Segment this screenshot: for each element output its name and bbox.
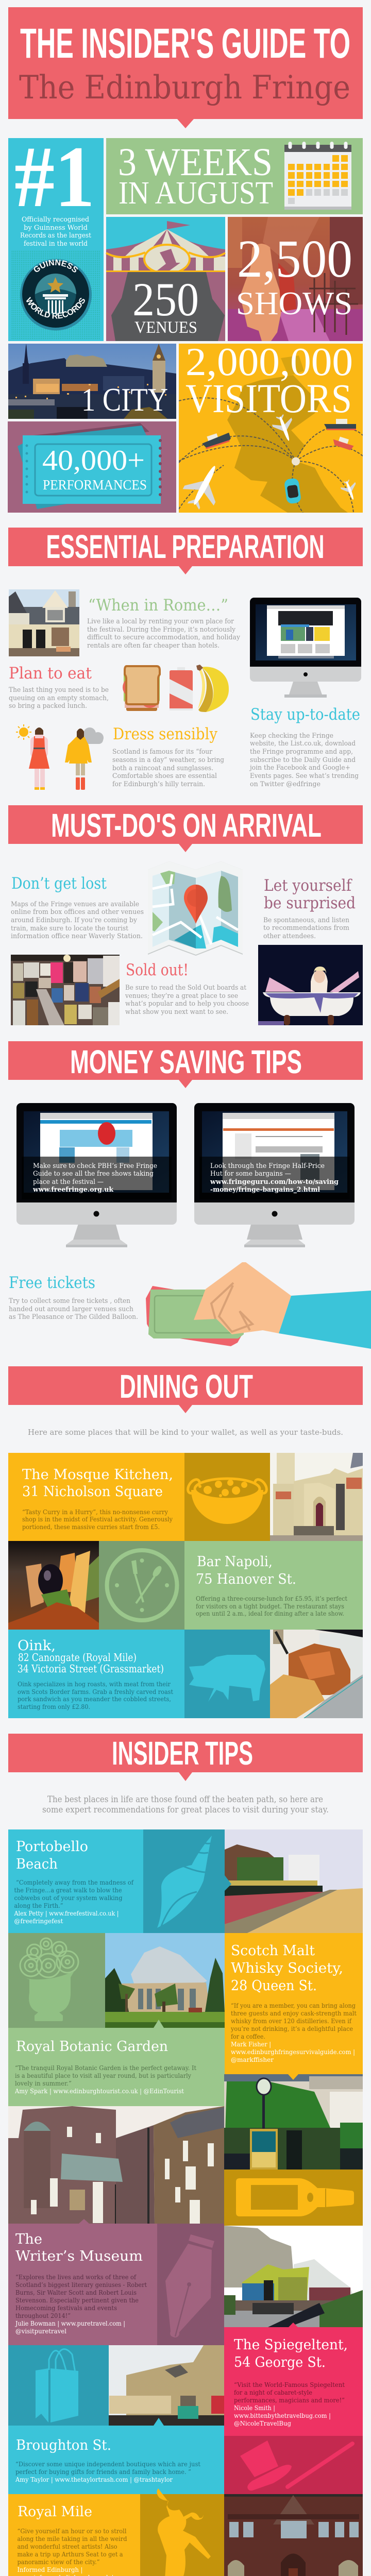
quote: Scotland’s biggest literary geniuses - Robert xyxy=(15,2281,147,2289)
panel: 2,000,000 visitors xyxy=(178,340,363,515)
panel: 250 venues xyxy=(106,217,225,341)
illustration: hand holding tickets xyxy=(146,1262,371,1349)
heading banner: essential preparation xyxy=(8,528,363,574)
photo: rigatoni pasta with olive xyxy=(8,1541,99,1630)
attribution: www.bittenbythetravelbug.com | xyxy=(234,2412,331,2419)
caption text: Look through the Fringe Half-Price xyxy=(210,1162,325,1170)
body text: Be spontaneous, and listen xyxy=(263,917,350,924)
icon: Guinness World Records badge xyxy=(20,259,92,331)
heading xyxy=(18,1638,164,1675)
stat: visitors: VISITORS xyxy=(185,377,352,421)
quote: for a coffee. xyxy=(231,2032,265,2040)
stat: 2,500: 2,500 xyxy=(237,229,352,289)
panel: Portobello Beach xyxy=(8,1829,225,1933)
heading banner: money saving tips xyxy=(8,1041,363,1088)
body text: website, the List.co.uk, download xyxy=(250,740,356,748)
quote: “Explores the lives and works of three of xyxy=(15,2273,137,2281)
panel: The Mosque Kitchen xyxy=(8,1453,270,1541)
body text: rentals are often far cheaper than hotels. xyxy=(87,642,220,650)
photo: Edinburgh at dusk xyxy=(8,344,176,419)
stat: 250: 250 xyxy=(132,273,199,326)
attribution: @visitpuretravel xyxy=(15,2327,66,2335)
photo: Broughton Street xyxy=(109,2345,224,2426)
icon: small plane xyxy=(340,479,356,500)
heading banner: insider tips: INSIDER TIPS xyxy=(112,1735,253,1772)
panel: Bar Napoli xyxy=(99,1541,363,1630)
quote: along the Firth.” xyxy=(14,1902,63,1909)
icon: bananas xyxy=(196,665,229,712)
panel: number one festival xyxy=(8,128,104,341)
photo: Scottish National Portrait Gallery xyxy=(224,2494,363,2576)
heading: Stay up-to-date xyxy=(250,705,360,724)
quote: make a trip up Arthurs Seat to get a xyxy=(18,2550,123,2558)
attribution xyxy=(231,2040,355,2063)
text: Guinness record: Records as the largest xyxy=(20,232,92,240)
heading: Portobello xyxy=(16,1839,88,1855)
heading: Writer’s Museum xyxy=(15,2248,143,2264)
panel: three weeks in August xyxy=(106,138,363,214)
description: Offering a three-course-lunch for £5.95, it’s perfect xyxy=(196,1595,347,1602)
description: open until 2 a.m., ideal for dining after a late show. xyxy=(196,1609,344,1617)
quote: and wonderful street artists! Also xyxy=(18,2543,117,2550)
quote xyxy=(15,2273,147,2319)
heading: 31 Nicholson Square xyxy=(22,1484,163,1500)
stat: venues: VENUES xyxy=(134,318,197,337)
photo: performer on stage xyxy=(228,217,363,341)
body text: around Edinburgh. If you’re coming by xyxy=(11,917,138,924)
attribution: www.edinburghfringesurvivalguide.com | xyxy=(231,2048,355,2056)
panel: bottle icon xyxy=(224,2170,363,2226)
quote: panoramic view of the city.” xyxy=(18,2558,100,2566)
photo: Edinburgh Central Mosque xyxy=(270,1453,363,1541)
quote: “Give yourself an hour or so to stroll xyxy=(18,2527,127,2535)
attribution xyxy=(234,2404,331,2427)
quote: “Completely away from the madness of xyxy=(16,1878,134,1886)
attribution: Nicole Smith | xyxy=(234,2404,275,2412)
attribution: Informed Edinburgh | xyxy=(18,2566,82,2573)
caption text: www.fringeguru.com/how-to/saving xyxy=(210,1178,339,1186)
attribution: Alex Petty | www.freefestival.co.uk | xyxy=(14,1909,119,1917)
attribution: Amy Spark | www.edinburghtourist.co.uk | @EdinTourist xyxy=(14,2087,184,2095)
attribution xyxy=(14,1909,119,1925)
body text: Maps of the Fringe venues are available xyxy=(11,901,139,908)
quote: three guests and enjoy cask-strength malt xyxy=(231,2009,357,2017)
icon: seashell xyxy=(157,1836,212,1928)
body text: information office near Waverly Station. xyxy=(11,933,143,940)
body text xyxy=(263,917,350,940)
quote: along the mile taking in all the weird xyxy=(18,2535,127,2543)
text: Guinness record: Officially recognised xyxy=(22,216,89,224)
heading banner: dining out xyxy=(8,1366,363,1413)
description: own Scots Border farms. Grab a freshly carved roast xyxy=(18,1688,173,1696)
text: Guinness record: festival in the world xyxy=(24,240,88,248)
quote: whisky from over 120 distilleries. Even if xyxy=(231,2017,352,2025)
heading: 54 George St. xyxy=(234,2354,326,2370)
body text: to recommendations from xyxy=(263,924,349,932)
photo: Palm House xyxy=(105,1933,225,2028)
icon: sandwich xyxy=(123,666,160,711)
description: for visitors on a tight budget. The restaurant stays xyxy=(196,1602,344,1610)
quote: performances, magicians and more!” xyxy=(234,2396,345,2404)
quote: lovely in summer.” xyxy=(15,2079,72,2087)
heading: 34 Victoria Street (Grassmarket) xyxy=(18,1663,164,1675)
body text: the festival. During the Fringe, it’s notoriously xyxy=(87,626,236,634)
icon: ticket xyxy=(18,423,162,509)
body text: subscribe to the Daily Guide and xyxy=(250,756,356,764)
caption text xyxy=(32,1162,157,1194)
intro text: insider tips: some expert recommendations for great places to visit during your stay. xyxy=(42,1805,329,1815)
heading: The Mosque Kitchen, xyxy=(22,1467,173,1483)
quote: the Fringe…a great walk to blow the xyxy=(14,1886,122,1894)
quote: Stevenson. Especially pertinent given the xyxy=(15,2296,139,2304)
quote xyxy=(234,2381,345,2404)
attribution xyxy=(18,2566,113,2576)
body text: train, make sure to locate the tourist xyxy=(11,925,129,933)
heading xyxy=(234,2337,348,2370)
heading: 82 Canongate (Royal Mile) xyxy=(18,1651,137,1664)
icon: woman in raincoat with cloud xyxy=(65,727,104,790)
tip: free tickets xyxy=(9,1274,138,1321)
heading: Broughton St. xyxy=(16,2437,111,2453)
description xyxy=(18,1680,173,1710)
panel: Oink xyxy=(8,1630,270,1718)
stat: 3 weeks: 3 WEEKS xyxy=(118,141,273,184)
attribution: Julie Bowman | www.puretravel.com | xyxy=(14,2319,125,2327)
description xyxy=(22,1508,173,1531)
stat: #1: #1 xyxy=(14,128,95,225)
photo: performer in a bathtub xyxy=(258,945,363,1025)
text: Guinness record: by Guinness World xyxy=(24,224,88,232)
tip: stay up-to-date xyxy=(249,705,360,788)
body text: join the Facebook and Google+ xyxy=(249,764,350,772)
body text: other attendees. xyxy=(263,933,316,940)
panel: Royal Mile xyxy=(8,2488,224,2576)
icon: Guinness World Records badge: GUINNESS xyxy=(34,260,78,273)
heading: “When in Rome…” xyxy=(88,596,228,615)
panel: Scotch Malt Whisky Society xyxy=(225,1933,363,2074)
caption overlay xyxy=(199,1157,350,1199)
heading: Royal Mile xyxy=(18,2504,92,2520)
body text xyxy=(9,1297,138,1321)
icon: woman in summer dress with sun xyxy=(16,724,49,790)
quote: “If you are a member, you can bring along xyxy=(231,2002,356,2009)
body text: on Twitter @edfringe xyxy=(250,781,321,788)
heading banner: insider tips xyxy=(8,1734,363,1781)
quote: “Visit the World-Famous Spiegeltent xyxy=(234,2381,345,2388)
stat: 40,000+: 40,000+ xyxy=(42,445,145,477)
caption text: -money/fringe-bargains_2.html xyxy=(210,1186,320,1194)
body text: difficult to secure accommodation, and holiday xyxy=(87,634,241,641)
icon: desktop monitor showing The List xyxy=(250,598,361,698)
photo: The Writer's Museum xyxy=(8,2106,224,2224)
tip: let yourself be surprised: be surprised xyxy=(264,894,356,912)
body text: Keep checking the Fringe xyxy=(250,732,333,740)
heading: The xyxy=(15,2231,42,2247)
body text: so bring a packed lunch. xyxy=(9,702,87,710)
body text: for Edinburgh’s hilly terrain. xyxy=(112,781,205,788)
quote: Burns, Sir Walter Scott and Robert Louis xyxy=(15,2289,137,2296)
caption text: place at the festival — xyxy=(33,1178,104,1186)
body text: both a raincoat and sunglasses. xyxy=(112,765,213,772)
panel: monitor with Free Fringe guide xyxy=(16,1103,177,1247)
attribution: @NicoleTravelBug xyxy=(234,2419,291,2427)
icon: ferry two xyxy=(324,419,356,430)
heading xyxy=(231,1943,343,1994)
body text: seasons in a day” weather, so bring xyxy=(112,756,224,764)
description: Oink specializes in hog roasts, with meat from their xyxy=(18,1680,171,1688)
body text: Events pages. See what’s trending xyxy=(250,772,359,780)
tip: plan to eat xyxy=(9,664,109,710)
body text: venues; they’re a great place to see xyxy=(125,992,238,1000)
description: “Tasty Curry in a Hurry”, this no-nonsense curry xyxy=(22,1508,168,1516)
icon: jester xyxy=(157,2488,211,2576)
quote: for a night of cabaret-style xyxy=(234,2388,312,2396)
intro text: dining out: Here are some places that will be kind to your wallet, as well as your taste-buds. xyxy=(28,1428,343,1437)
tip: when in Rome xyxy=(87,596,241,650)
body text: the Fringe programme and app, xyxy=(250,748,353,756)
quote xyxy=(230,2002,357,2040)
heading: 75 Hanover St. xyxy=(196,1571,296,1587)
icon: flower urn xyxy=(20,1938,78,2021)
stat: shows: SHOWS xyxy=(236,285,352,321)
icon: pig xyxy=(189,1655,265,1702)
heading banner: dining out: DINING OUT xyxy=(120,1368,253,1405)
attribution xyxy=(14,2319,125,2335)
quote xyxy=(15,2064,196,2087)
panel: monitor with Fringe Half-Price Hut xyxy=(194,1103,355,1247)
caption text: Guide to see all the free shows taking xyxy=(33,1170,154,1178)
icon: fountain pen nib xyxy=(165,2234,214,2337)
intro text: insider tips xyxy=(42,1794,329,1815)
description: shop is in the midst of Festival activity. Generously xyxy=(22,1515,173,1523)
body text: what show you next want to see. xyxy=(125,1008,228,1016)
tip: don't get lost xyxy=(11,874,144,940)
body text xyxy=(249,732,359,788)
icon: clock with cutlery xyxy=(107,1550,177,1620)
tip: sold out xyxy=(125,961,249,1016)
body text xyxy=(87,618,241,650)
quote: Homecoming festivals and events xyxy=(15,2304,117,2312)
heading xyxy=(16,1839,88,1872)
description: portioned, these massive curries start from £5. xyxy=(22,1523,160,1531)
heading banner: must-do's on arrival xyxy=(8,805,363,852)
quote: cobwebs out of your system walking xyxy=(14,1894,123,1902)
heading: Oink, xyxy=(18,1638,56,1654)
icon: Guinness World Records badge: WORLD RECORDS xyxy=(26,297,85,318)
icon: car xyxy=(284,478,301,504)
description: pork sandwich as you meander the cobbled streets, xyxy=(18,1695,171,1703)
body text: Comfortable shoes are essential xyxy=(112,772,217,780)
body text: Be sure to read the Sold Out boards at xyxy=(125,984,247,992)
body text: queuing on an empty stomach, xyxy=(9,694,109,702)
icon: folded map with pin xyxy=(148,861,243,956)
caption text: Make sure to check PBH’s Free Fringe xyxy=(33,1162,157,1170)
photo: whisky society entrance xyxy=(224,2074,363,2170)
heading xyxy=(196,1554,296,1587)
icon: curry pot xyxy=(185,1478,269,1524)
attribution: Mark Fisher | xyxy=(231,2040,271,2048)
quote xyxy=(18,2527,127,2566)
body text: as The Pleasance or The Gilded Balloon. xyxy=(9,1313,138,1321)
tip: let yourself be surprised xyxy=(263,876,356,940)
body text: Live like a local by renting your own place for xyxy=(87,618,234,625)
quote: you’re not drinking, it’s a delightful place xyxy=(230,2025,353,2032)
heading xyxy=(15,2231,143,2264)
photo: hog roast xyxy=(270,1630,363,1718)
body text: handed out around larger venues such xyxy=(9,1306,134,1313)
heading xyxy=(22,1467,173,1500)
heading: Dress sensibly xyxy=(113,725,217,743)
icon: soda can xyxy=(170,667,193,710)
icon: shopping bag xyxy=(36,2349,78,2422)
heading: The Spiegeltent, xyxy=(234,2337,348,2353)
intro text: insider tips: The best places in life are those found off the beaten path, so here are xyxy=(47,1794,323,1805)
attribution: @markffisher xyxy=(231,2056,274,2063)
description xyxy=(196,1595,347,1617)
body text xyxy=(9,686,109,710)
heading: Let yourself xyxy=(264,876,352,895)
attribution: Amy Taylor | www.thetaylortrash.com | @trashtaylor xyxy=(15,2476,173,2483)
photo: Portobello promenade xyxy=(225,1829,363,1933)
body text xyxy=(11,901,144,940)
icon: ferry one xyxy=(202,433,231,449)
body text: Try to collect some free tickets , often xyxy=(9,1297,131,1305)
title banner xyxy=(8,7,363,128)
photo: poster wall xyxy=(11,955,120,1025)
caption text: www.freefringe.org.uk xyxy=(32,1186,114,1194)
icon: circus tent xyxy=(106,221,225,341)
heading: Scotch Malt xyxy=(231,1943,315,1959)
body text: online from box offices and other venues xyxy=(11,908,144,916)
description: starting from only £2.80. xyxy=(18,1703,90,1710)
icon: medium plane xyxy=(272,414,292,441)
heading: Free tickets xyxy=(9,1274,95,1292)
body text: what’s popular and to help you choose xyxy=(125,1000,249,1008)
panel: The Spiegeltent xyxy=(224,2327,363,2494)
heading: Beach xyxy=(16,1856,58,1872)
tip: dress sensibly xyxy=(112,725,224,788)
icon: red boat xyxy=(333,437,353,450)
heading: 28 Queen St. xyxy=(231,1978,317,1994)
heading: Bar Napoli, xyxy=(197,1554,273,1570)
quote: throughout 2014!” xyxy=(15,2312,71,2319)
text: Guinness record xyxy=(20,216,92,248)
heading: Plan to eat xyxy=(9,664,92,683)
quote: “Discover some unique independent boutiques which are just xyxy=(15,2460,200,2468)
heading: Sold out! xyxy=(126,961,189,979)
quote xyxy=(14,1878,134,1909)
attribution: @freefringefest xyxy=(14,1917,63,1925)
map of Scotland and northern England xyxy=(178,355,363,515)
heading: Royal Botanic Garden xyxy=(16,2039,168,2055)
body text: Scotland is famous for its “four xyxy=(112,748,213,756)
panel: Royal Botanic Garden xyxy=(8,1933,225,2106)
dashed routes xyxy=(179,398,363,513)
icon: top hat and wand xyxy=(240,2441,352,2490)
panel: 1 city xyxy=(8,344,176,419)
body text xyxy=(125,984,249,1016)
stat: performances: PERFORMANCES xyxy=(43,477,147,493)
photo: rental house xyxy=(9,589,79,656)
body text xyxy=(112,748,224,788)
icon: calendar xyxy=(284,142,351,210)
icon: whisky bottle xyxy=(236,2178,354,2216)
quote: “The tranquil Royal Botanic Garden is the perfect getaway. It xyxy=(15,2064,196,2072)
photo: The Spiegeltent xyxy=(224,2226,363,2327)
heading: Whisky Society, xyxy=(231,1960,343,1976)
heading: Don’t get lost xyxy=(11,874,107,893)
caption overlay xyxy=(22,1157,172,1199)
quote: perfect for buying gifts for friends and family back home. ” xyxy=(15,2468,191,2476)
quote xyxy=(15,2460,200,2476)
quote: is a beautiful place to visit all year round, but is particularly xyxy=(15,2072,192,2079)
panel: 40,000+ performances xyxy=(8,421,176,513)
icon: large plane xyxy=(182,466,215,510)
caption text: Hut for some bargains — xyxy=(210,1170,291,1178)
body text: The last thing you need is to be xyxy=(9,686,109,694)
caption text xyxy=(210,1162,339,1194)
panel: 2,500 shows xyxy=(228,217,363,341)
stat: 1 city: 1 CITY xyxy=(81,381,168,418)
panel: Broughton St. xyxy=(8,2345,224,2494)
stat: 2,000,000: 2,000,000 xyxy=(185,340,353,384)
panel: The Writer's Museum xyxy=(8,2224,224,2345)
stat: in August: IN AUGUST xyxy=(119,176,273,211)
